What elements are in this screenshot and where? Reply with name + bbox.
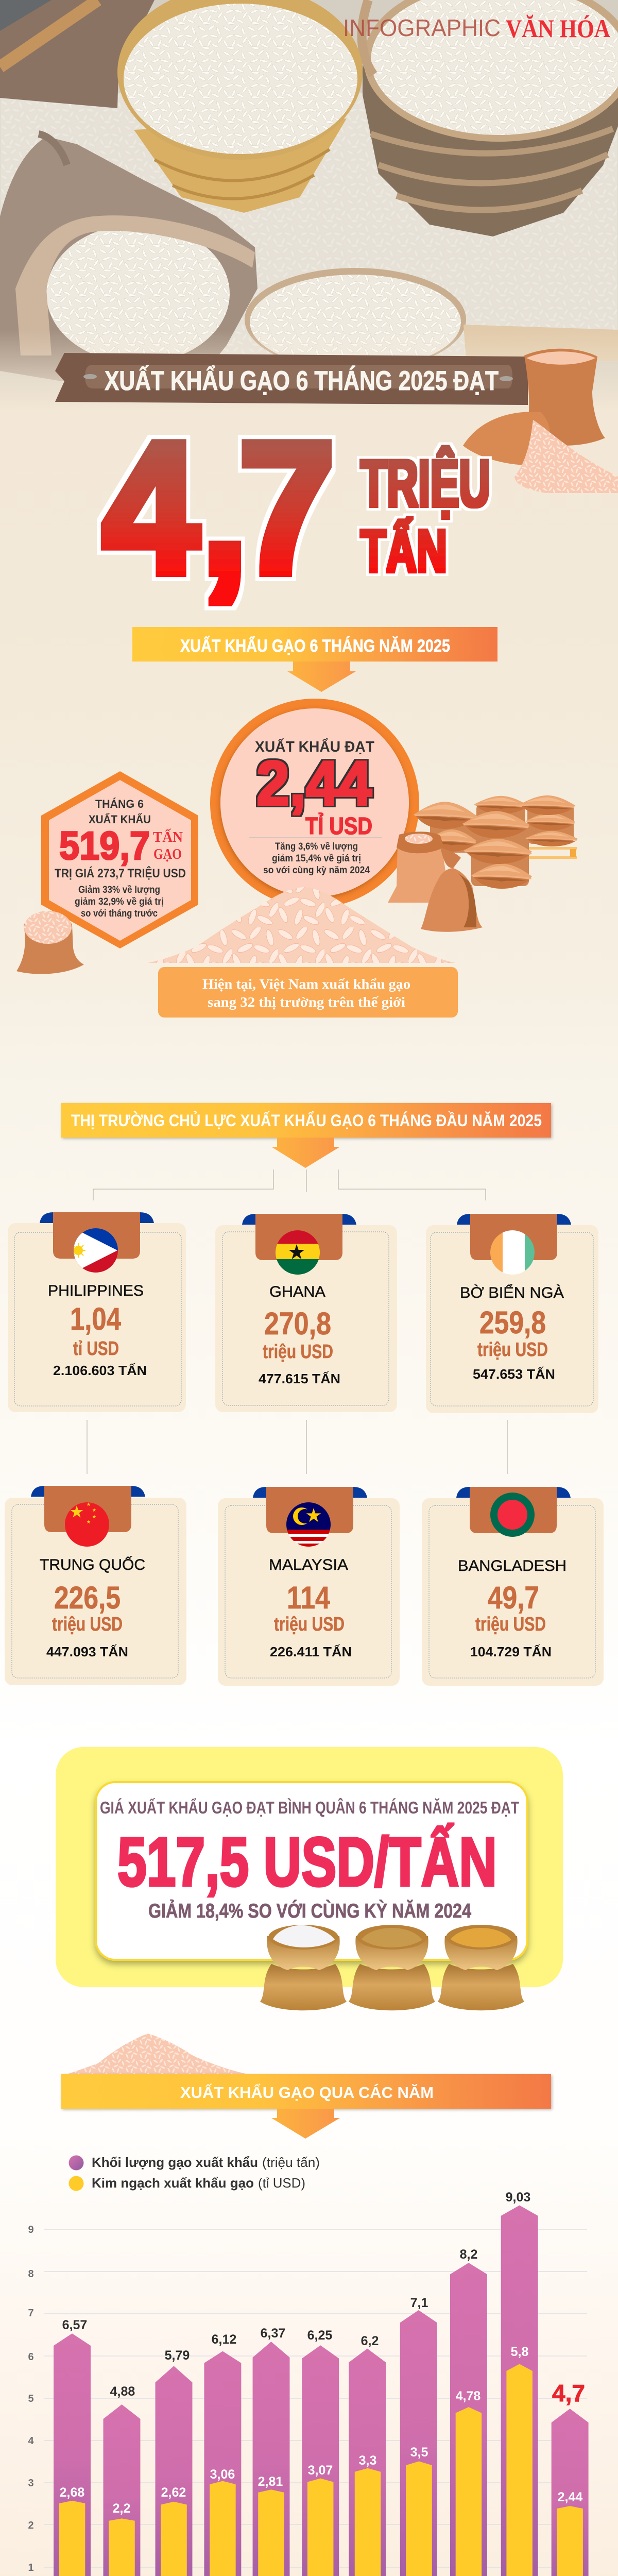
panel: main circle, 2.44 billion USD: giảm 15,4% về giá trị bbox=[272, 853, 361, 864]
volume value labels: 9,03 bbox=[506, 2190, 530, 2205]
section heading: 6 month export: XUẤT KHẨU GẠO 6 THÁNG NĂM 2025 bbox=[180, 636, 450, 656]
panel: main circle, 2.44 billion USD bbox=[210, 699, 419, 908]
y axis labels: 7 bbox=[28, 2308, 34, 2319]
volume value labels: 6,57 bbox=[62, 2318, 87, 2332]
panel: Bangladesh: triệu USD bbox=[475, 1614, 546, 1635]
panel: Malaysia: 114 bbox=[287, 1580, 330, 1615]
panel: Philippines: tỉ USD bbox=[73, 1338, 119, 1360]
section heading: 6 month export bbox=[132, 627, 497, 692]
flag: Philippines bbox=[71, 1228, 118, 1273]
flag: Bangladesh bbox=[490, 1493, 535, 1537]
panel: main circle, 2.44 billion USD: Tăng 3,6% về lượng bbox=[275, 841, 358, 852]
panel: June hexagon: THÁNG 6 bbox=[95, 798, 144, 810]
value labels: 2,44 bbox=[558, 2490, 582, 2504]
panel: main circle, 2.44 billion USD: so với cùng kỳ năm 2024 bbox=[263, 865, 370, 876]
volume value labels: 6,2 bbox=[361, 2334, 379, 2348]
value labels bbox=[60, 2345, 582, 2516]
volume value labels: 6,12 bbox=[212, 2332, 236, 2347]
panel: Philippines: PHILIPPINES bbox=[48, 1282, 144, 1299]
flag: Ghana bbox=[276, 1230, 320, 1275]
logo: Infographic Văn Hóa: INFOGRAPHIC bbox=[343, 14, 501, 41]
panel: June hexagon: giảm 32,9% về giá trị bbox=[75, 896, 164, 907]
legend bbox=[69, 2155, 320, 2191]
panel: China: triệu USD bbox=[52, 1614, 123, 1635]
panel: Bangladesh bbox=[422, 1487, 604, 1686]
flag: Malaysia bbox=[286, 1502, 331, 1548]
panel: Ivory Coast: BỜ BIỂN NGÀ bbox=[460, 1284, 564, 1301]
title banner: wooden plank: XUẤT KHẨU GẠO 6 THÁNG 2025 ĐẠT bbox=[105, 365, 499, 396]
panel: Ivory Coast: 259,8 bbox=[479, 1305, 546, 1340]
y axis labels: 6 bbox=[28, 2351, 34, 2363]
volume value labels: 6,25 bbox=[307, 2328, 332, 2343]
legend: Kim ngạch xuất khẩu gạo bbox=[92, 2175, 254, 2191]
bar chart: exports by year bbox=[28, 2190, 606, 2576]
panel: June hexagon: so với tháng trước bbox=[81, 908, 158, 919]
panel: Ivory Coast: 547.653 TẤN bbox=[473, 1366, 555, 1382]
panel: Bangladesh: 49,7 bbox=[488, 1580, 539, 1615]
section heading: main markets: THỊ TRƯỜNG CHỦ LỰC XUẤT KHẨU GẠO 6 THÁNG ĐẦU NĂM 2025 bbox=[71, 1111, 542, 1130]
panel: June hexagon bbox=[41, 771, 198, 948]
flag: Ivory Coast bbox=[490, 1230, 535, 1275]
section heading: exports by year bbox=[61, 2074, 551, 2139]
panel: Philippines: 1,04 bbox=[70, 1301, 121, 1336]
panel: June hexagon: TẤN bbox=[153, 829, 183, 845]
panel: June hexagon: Giảm 33% về lượng bbox=[78, 885, 160, 895]
callout: 32 markets: sang 32 thị trường trên thế giới bbox=[208, 994, 406, 1010]
panel: Ivory Coast: triệu USD bbox=[477, 1339, 548, 1361]
panel: China: TRUNG QUỐC bbox=[40, 1556, 145, 1573]
panel: China bbox=[5, 1486, 186, 1685]
callout: 32 markets bbox=[158, 967, 458, 1018]
value labels: 3,06 bbox=[210, 2467, 235, 2482]
big number: 4,7: 4,7 bbox=[102, 402, 336, 613]
panel: average export price: GIÁ XUẤT KHẨU GẠO ĐẠT BÌNH QUÂN 6 THÁNG NĂM 2025 ĐẠT bbox=[100, 1798, 519, 1817]
panel: Ghana: 270,8 bbox=[264, 1306, 331, 1341]
y axis labels bbox=[28, 2224, 41, 2576]
panel: main circle, 2.44 billion USD: 2,44 bbox=[256, 748, 372, 818]
value labels: 2,68 bbox=[60, 2485, 84, 2500]
big unit: triệu tấn: TRIỆU bbox=[360, 446, 490, 521]
panel: Ghana: triệu USD bbox=[263, 1341, 333, 1363]
value labels: 2,2 bbox=[113, 2501, 130, 2516]
title banner: wooden plank bbox=[55, 353, 528, 405]
y axis labels: 3 bbox=[28, 2478, 34, 2489]
panel: Bangladesh: BANGLADESH bbox=[458, 1557, 566, 1574]
icon: rice pile over yearly heading bbox=[67, 2033, 248, 2074]
panel: June hexagon: GẠO bbox=[153, 846, 182, 862]
purple bars: volume bbox=[54, 2205, 589, 2576]
big unit: triệu tấn: TẤN bbox=[360, 517, 447, 585]
y axis labels: 9 bbox=[28, 2224, 34, 2235]
y axis labels: 2 bbox=[28, 2520, 34, 2531]
flag: China bbox=[65, 1502, 109, 1547]
y axis labels: 8 bbox=[28, 2268, 34, 2280]
panel: Ghana: GHANA bbox=[269, 1283, 325, 1300]
legend: (triệu tấn) bbox=[262, 2155, 320, 2170]
panel: Malaysia: triệu USD bbox=[274, 1614, 345, 1635]
panel: Philippines bbox=[8, 1212, 186, 1412]
panel: Malaysia bbox=[218, 1487, 400, 1686]
panel: China: 447.093 TẤN bbox=[46, 1644, 128, 1659]
panel: Malaysia: MALAYSIA bbox=[269, 1556, 348, 1573]
yellow bars: value bbox=[59, 2364, 583, 2576]
value labels: 3,5 bbox=[410, 2445, 428, 2460]
panel: average export price bbox=[56, 1747, 563, 1987]
legend: Khối lượng gạo xuất khẩu bbox=[92, 2155, 258, 2170]
legend: (tỉ USD) bbox=[258, 2175, 305, 2191]
volume value labels: 6,37 bbox=[261, 2326, 285, 2341]
panel: Ghana bbox=[215, 1214, 397, 1412]
panel: Ghana: 477.615 TẤN bbox=[259, 1371, 340, 1386]
volume value labels: 4,88 bbox=[110, 2384, 135, 2399]
y axis labels: 1 bbox=[28, 2562, 34, 2573]
hero photo: rice baskets bbox=[0, 0, 618, 412]
volume value labels: 8,2 bbox=[460, 2247, 477, 2262]
panel: main circle, 2.44 billion USD: TỈ USD bbox=[305, 812, 372, 839]
volume value labels: 7,1 bbox=[410, 2296, 428, 2310]
value labels: 3,07 bbox=[308, 2463, 333, 2478]
panel: June hexagon: 519,7 bbox=[59, 824, 150, 868]
icon: pink rice pile bbox=[148, 887, 455, 963]
value labels: 2,62 bbox=[161, 2485, 186, 2500]
section heading: main markets bbox=[61, 1103, 551, 1168]
panel: June hexagon: TRỊ GIÁ 273,7 TRIỆU USD bbox=[55, 866, 186, 880]
icon: small sack bbox=[16, 911, 84, 974]
value labels: 3,3 bbox=[359, 2453, 376, 2468]
section heading: exports by year: XUẤT KHẨU GẠO QUA CÁC NĂM bbox=[180, 2083, 434, 2102]
volume value labels: 5,79 bbox=[165, 2348, 190, 2363]
panel: average export price: GIẢM 18,4% SO VỚI CÙNG KỲ NĂM 2024 bbox=[148, 1900, 471, 1922]
panel: average export price: 517,5 USD/TẤN bbox=[117, 1823, 497, 1901]
y axis labels: 5 bbox=[28, 2393, 34, 2404]
icon: stacked rice sacks bbox=[388, 795, 578, 932]
panel: main circle, 2.44 billion USD: XUẤT KHẨU ĐẠT bbox=[255, 738, 374, 755]
panel: Malaysia: 226.411 TẤN bbox=[270, 1644, 352, 1659]
value labels: 4,78 bbox=[456, 2389, 480, 2403]
panel: Philippines: 2.106.603 TẤN bbox=[53, 1363, 147, 1378]
icon: hero sacks with pink rice bbox=[463, 349, 618, 493]
value labels: 5,8 bbox=[511, 2345, 528, 2359]
panel: Ivory Coast bbox=[426, 1214, 598, 1413]
value labels: 2,81 bbox=[258, 2475, 283, 2489]
panel: June hexagon: XUẤT KHẨU bbox=[89, 813, 151, 826]
big unit: triệu tấn bbox=[360, 446, 490, 585]
panel: Bangladesh: 104.729 TẤN bbox=[470, 1644, 552, 1659]
panel: China: 226,5 bbox=[54, 1580, 121, 1615]
icon: three sacks of grain bbox=[260, 1925, 524, 2010]
volume value labels bbox=[62, 2190, 530, 2399]
highlighted 4.7 label: 4,7 bbox=[552, 2380, 585, 2406]
y axis labels: 4 bbox=[28, 2435, 34, 2447]
logo: Infographic Văn Hóa bbox=[343, 14, 610, 43]
callout: 32 markets: Hiện tại, Việt Nam xuất khẩu gạo bbox=[202, 976, 410, 992]
